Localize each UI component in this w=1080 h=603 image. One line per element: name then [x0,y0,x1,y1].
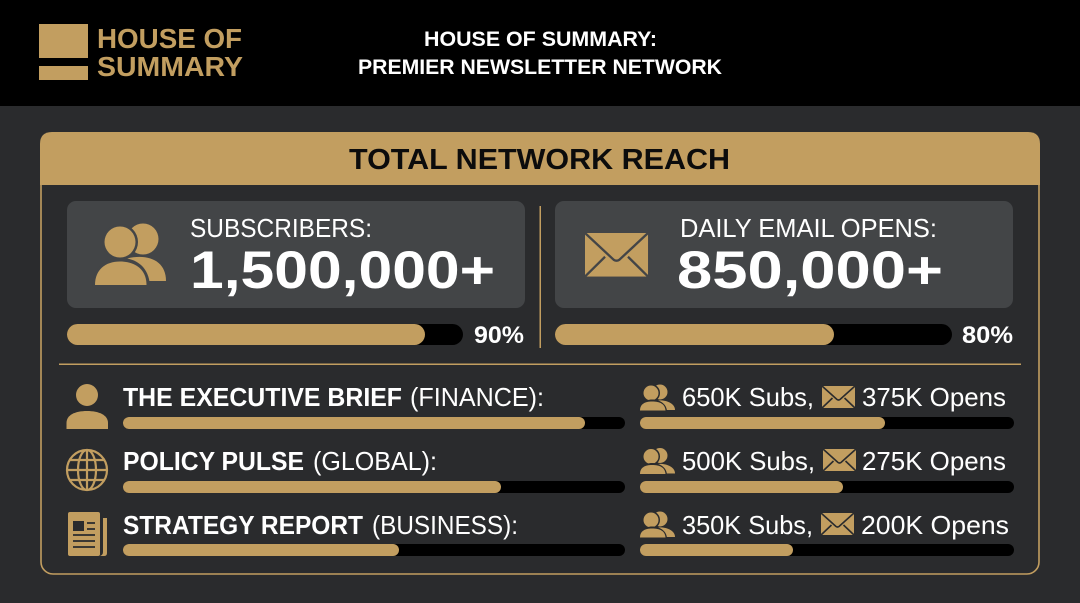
progress bar: subscribers 90% [67,322,524,349]
row: strategy report: (BUSINESS): [372,510,518,540]
stat card: daily email opens: 850,000+ [677,241,943,300]
title: PREMIER NEWSLETTER NETWORK [358,56,722,79]
header band [0,0,1080,106]
icon: person [66,384,108,429]
row: strategy report [68,510,1014,556]
row: the executive brief: THE EXECUTIVE BRIEF [123,382,402,412]
row: the executive brief: 375K Opens [862,382,1006,412]
row: the executive brief [66,382,1014,429]
icon: users [92,224,166,288]
stat card: subscribers [67,201,525,308]
panel: total network reach [40,132,1040,574]
panel heading band [40,132,1040,185]
logo: HOUSE OF [97,23,242,54]
stat card: subscribers: 1,500,000+ [190,241,495,300]
icon: newspaper [68,512,107,556]
title: HOUSE OF SUMMARY: [424,28,657,51]
stat card: subscribers: SUBSCRIBERS: [190,213,372,243]
progress bar: subscribers 90%: 90% [474,322,524,349]
logo [39,23,243,82]
row: policy pulse: 275K Opens [862,446,1006,476]
stat card: daily email opens [555,201,1013,308]
stat card: daily email opens: DAILY EMAIL OPENS: [680,213,937,243]
row: policy pulse: (GLOBAL): [313,446,437,476]
progress bar: opens 80%: 80% [962,322,1013,349]
title [358,28,722,79]
row: strategy report: 350K Subs, [682,510,813,540]
progress bar: opens 80% [555,322,1013,349]
icon: globe [67,450,107,490]
logo: SUMMARY [97,51,243,82]
heading: TOTAL NETWORK REACH [349,144,730,176]
row: strategy report: STRATEGY REPORT [123,510,363,540]
row: the executive brief: (FINANCE): [410,382,544,412]
row: the executive brief: 650K Subs, [682,382,814,412]
row: policy pulse: POLICY PULSE [123,446,304,476]
row: policy pulse: 500K Subs, [682,446,815,476]
row: policy pulse [67,446,1014,493]
icon: envelope [585,233,648,277]
row: strategy report: 200K Opens [861,510,1009,540]
